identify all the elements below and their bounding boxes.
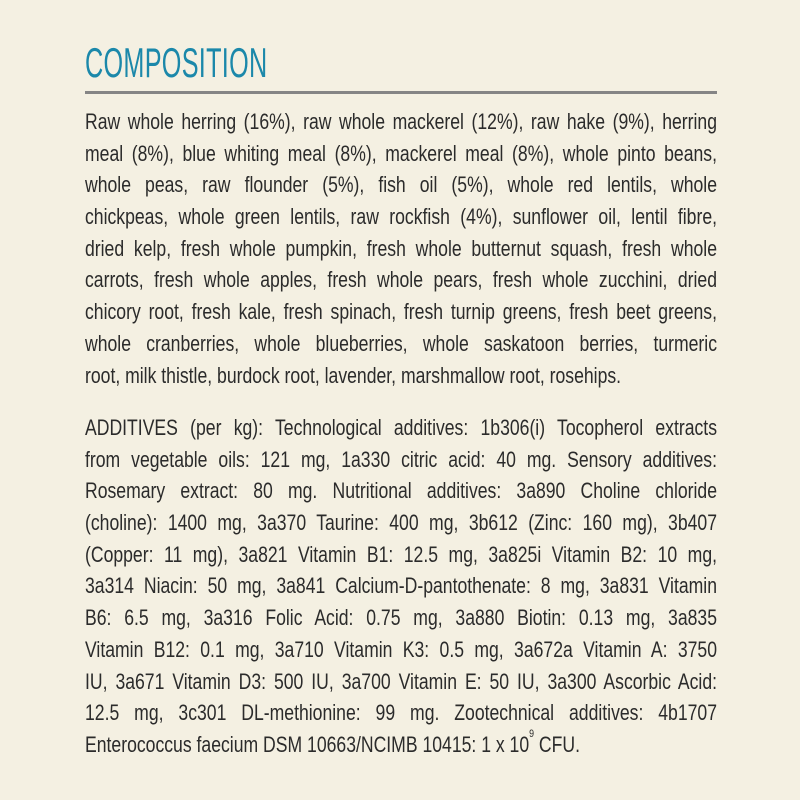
- title: COMPOSITION: [85, 39, 268, 86]
- text block: additives: (choline): 1400 mg, 3a370 Taurine: 400 mg, 3b612 (Zinc: 160 mg), 3b407: [85, 510, 717, 535]
- text block: additives: ADDITIVES (per kg): Technological additives: 1b306(i) Tocopherol extracts: [85, 415, 717, 440]
- text block: ingredients: whole cranberries, whole blueberries, whole saskatoon berries, turmeric: [85, 331, 717, 356]
- text block: additives: B6: 6.5 mg, 3a316 Folic Acid: 0.75 mg, 3a880 Biotin: 0.13 mg, 3a835: [85, 605, 717, 630]
- text block: additives: (Copper: 11 mg), 3a821 Vitamin B1: 12.5 mg, 3a825i Vitamin B2: 10 mg,: [85, 542, 717, 567]
- text block: additives: IU, 3a671 Vitamin D3: 500 IU, 3a700 Vitamin E: 50 IU, 3a300 Ascorbic Acid:: [85, 668, 717, 694]
- text block: additives: 12.5 mg, 3c301 DL-methionine: 99 mg. Zootechnical additives: 4b1707: [85, 700, 717, 725]
- text block: additives: from vegetable oils: 121 mg, 1a330 citric acid: 40 mg. Sensory additives:: [85, 447, 717, 472]
- text block: ingredients: dried kelp, fresh whole pumpkin, fresh whole butternut squash, fresh whole: [85, 236, 717, 261]
- text block: additives: Rosemary extract: 80 mg. Nutritional additives: 3a890 Choline chloride: [85, 478, 717, 503]
- text block: additives: 3a314 Niacin: 50 mg, 3a841 Calcium-D-pantothenate: 8 mg, 3a831 Vitamin: [85, 573, 717, 598]
- text block: ingredients: [85, 109, 717, 388]
- text block: additives: [85, 415, 717, 757]
- text block: ingredients: chicory root, fresh kale, fresh spinach, fresh turnip greens, fresh beet greens,: [85, 299, 717, 324]
- text block: ingredients: meal (8%), blue whiting meal (8%), mackerel meal (8%), whole pinto beans,: [85, 141, 717, 166]
- text block: additives: Vitamin B12: 0.1 mg, 3a710 Vitamin K3: 0.5 mg, 3a672a Vitamin A: 3750: [85, 637, 717, 662]
- text block: ingredients: Raw whole herring (16%), raw whole mackerel (12%), raw hake (9%), herring: [85, 109, 717, 134]
- text block: ingredients: chickpeas, whole green lentils, raw rockfish (4%), sunflower oil, lentil fibre,: [85, 204, 717, 229]
- text block: ingredients: carrots, fresh whole apples, fresh whole pears, fresh whole zucchini, dried: [85, 267, 717, 292]
- text block: ingredients: root, milk thistle, burdock root, lavender, marshmallow root, rosehips.: [85, 362, 621, 388]
- text block: additives: Enterococcus faecium DSM 10663/NCIMB 10415: 1 x 109 CFU.: [85, 728, 580, 757]
- text block: ingredients: whole peas, raw flounder (5%), fish oil (5%), whole red lentils, whole: [85, 172, 717, 197]
